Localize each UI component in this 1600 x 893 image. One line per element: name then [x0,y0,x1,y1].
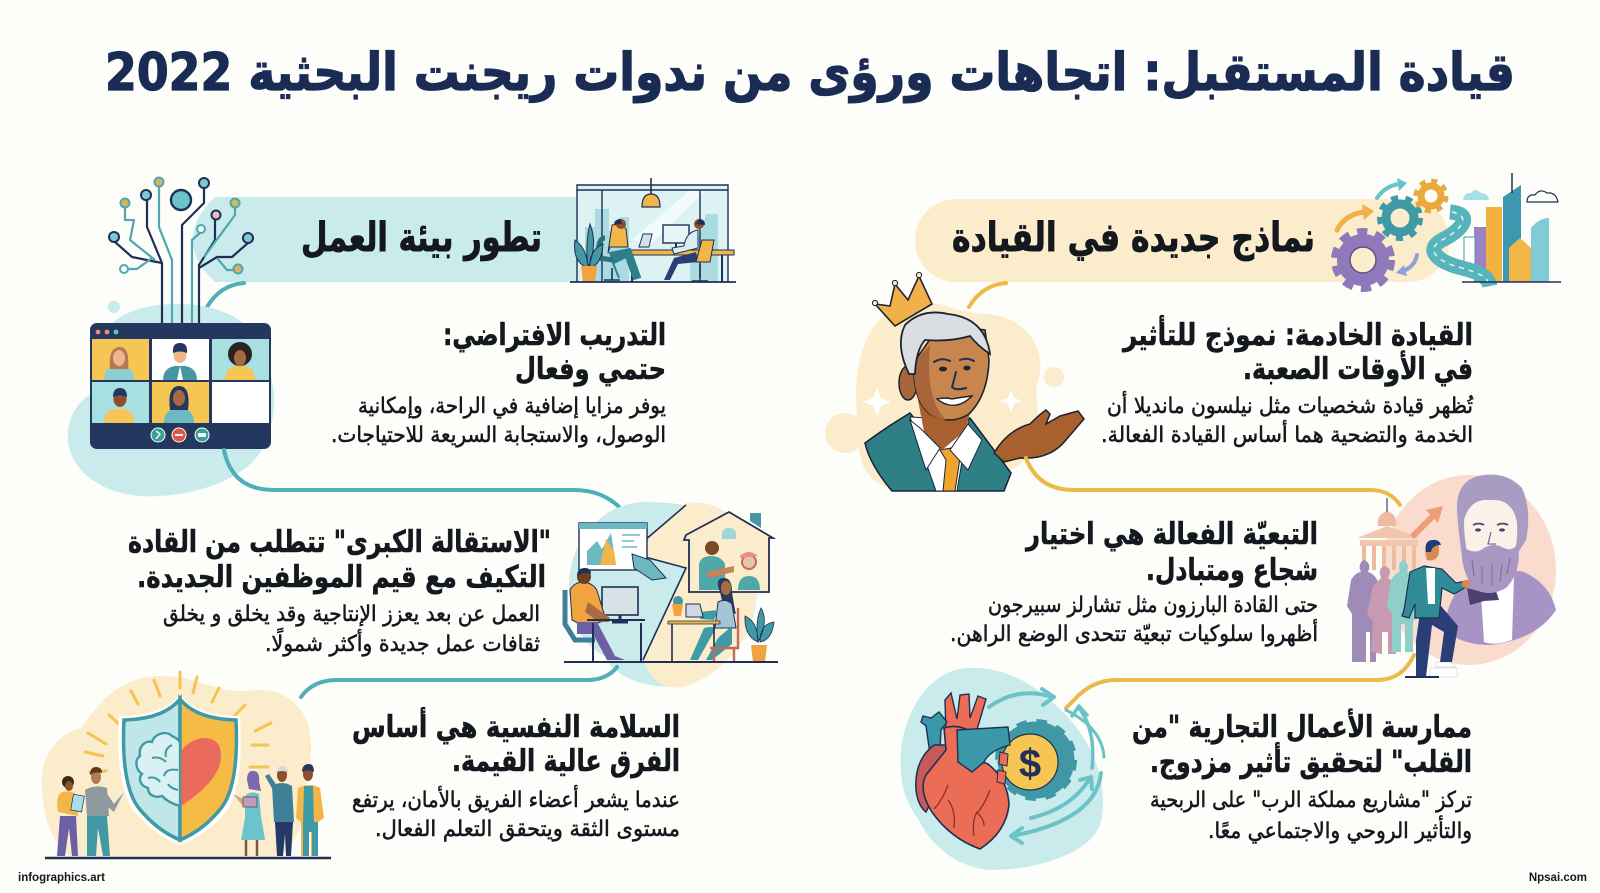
text block: servant leadership: الخدمة والتضحية هما أساس القيادة الفعالة. [1101,420,1473,448]
text block: effective followership: حتى القادة البارزون مثل تشارلز سبيرجون [988,593,1318,618]
text block: great resignation [128,525,551,657]
footer credit: infographics.art: infographics.art [18,872,105,884]
icon: office with two workers [570,178,736,282]
text block: psychological safety [352,707,680,842]
banner: evolving workplace [192,197,580,282]
text block: great resignation: "الاستقالة الكبرى" تتطلب من القادة [128,525,551,560]
illustration: video call screen [68,301,274,496]
text block: virtual training: حتمي وفعال [515,352,666,387]
text block: effective followership: أظهروا سلوكيات تبعيّة تتحدى الوضع الراهن. [950,619,1318,647]
text block: great resignation: التكيف مع قيم الموظفين الجديدة. [137,560,546,595]
connector: followership to business from the heart [1066,655,1414,708]
illustration: remote and home work [564,502,778,687]
text block: servant leadership: القيادة الخادمة: نموذج للتأثير [1121,315,1473,353]
text block: servant leadership: في الأوقات الصعبة. [1243,350,1473,387]
banner: new leadership models: نماذج جديدة في القيادة [952,215,1315,261]
banner: new leadership models [915,199,1449,282]
icon: circuit tree [109,178,253,323]
text block: servant leadership [1101,315,1474,448]
illustration: Charles Spurgeon and follower [1347,474,1556,677]
panel: evolving workplace [42,178,778,858]
text block: psychological safety: السلامة النفسية هي أساس [352,707,680,745]
illustration: shield with brain and heart [42,672,331,858]
text block: effective followership [950,517,1318,647]
text block: virtual training [331,318,666,448]
illustration: heart and dollar gear: $ [1019,742,1041,786]
text block: effective followership: التبعيّة الفعالة هي اختيار [1024,517,1318,552]
text block: business from the heart [1132,708,1472,844]
icon: gears, road and city [1335,173,1561,288]
text block: great resignation: العمل عن بعد يعزز الإنتاجية وقد يخلق و يخلق [163,602,540,627]
text block: virtual training: الوصول، والاستجابة السريعة للاحتياجات. [331,423,666,448]
illustration: heart and dollar gear [901,668,1104,870]
text block: great resignation: ثقافات عمل جديدة وأكثر شمولًا. [265,627,540,657]
text block: servant leadership: تُظهر قيادة شخصيات مثل نيلسون مانديلا أن [1107,391,1474,419]
footer credit: Npsai.com: Npsai.com [1529,872,1587,884]
connector: virtual training to great resignation [224,450,622,510]
text block: business from the heart: القلب" لتحقيق تأثير مزدوج. [1150,742,1472,780]
illustration: Nelson Mandela with crown [825,272,1084,491]
text block: business from the heart: ممارسة الأعمال التجارية "من [1132,708,1472,745]
text block: effective followership: شجاع ومتبادل. [1146,553,1318,588]
connector: banner to servant leadership [969,283,1006,307]
connector: servant leadership to followership [1026,458,1400,505]
banner: evolving workplace: تطور بيئة العمل [301,215,542,261]
text block: virtual training: التدريب الافتراضي: [443,318,666,353]
text block: business from the heart: والتأثير الروحي والاجتماعي معًا. [1208,815,1472,844]
connector: great resignation to psychological safety [301,667,617,697]
text block: psychological safety: الفرق عالية القيمة. [452,744,680,779]
text block: psychological safety: عندما يشعر أعضاء الفريق بالأمان، يرتفع [352,785,680,813]
text block: business from the heart: تركز "مشاريع مملكة الرب" على الربحية [1150,788,1472,813]
connector: banner to virtual training [207,283,244,307]
text block: psychological safety: مستوى الثقة ويتحقق التعلم الفعال. [375,817,680,842]
text block: virtual training: يوفر مزايا إضافية في الراحة، وإمكانية [358,394,666,419]
panel: new leadership models [825,173,1561,870]
